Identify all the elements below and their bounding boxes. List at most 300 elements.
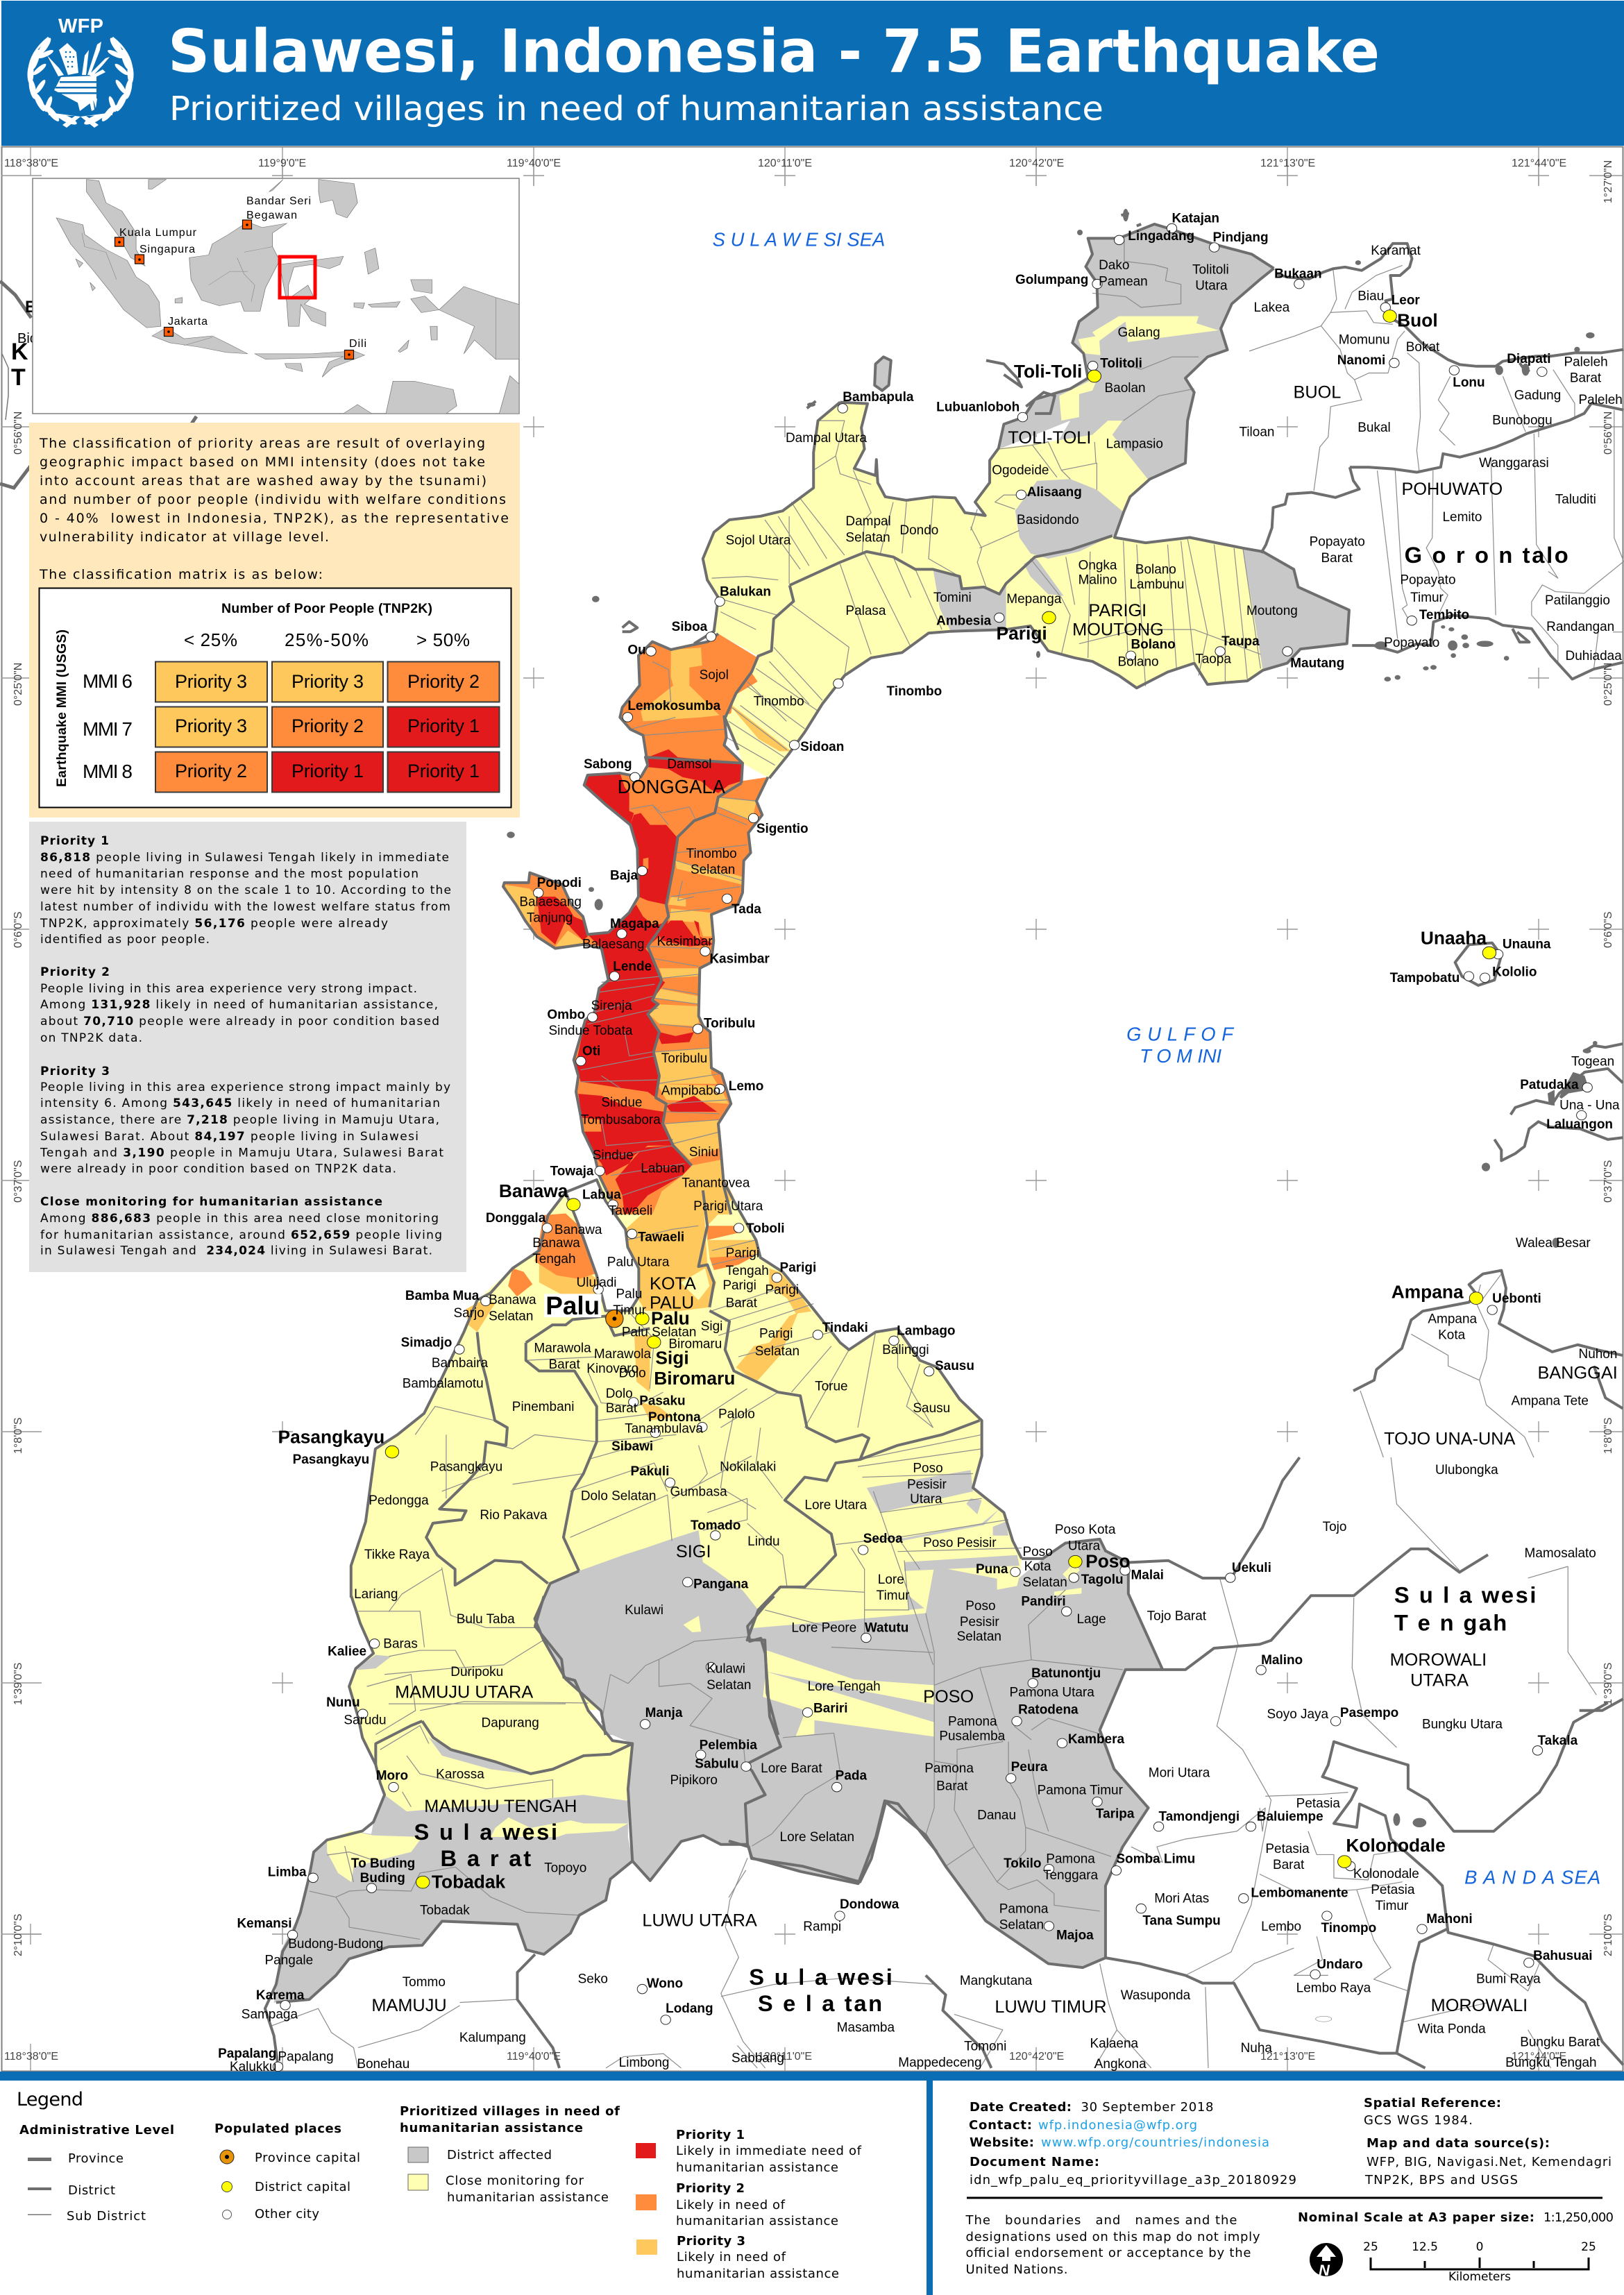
map labels: provinces (414, 542, 1568, 2016)
map labels: sub-districts: Dapurang (482, 1716, 539, 1731)
map labels: sub-districts: Bungku Tengah (1505, 2056, 1597, 2070)
map labels: sub-districts: Sirenja (591, 999, 632, 1013)
map labels: sub-districts: Pamona (1046, 1852, 1095, 1867)
map labels: towns: Moro (376, 1769, 408, 1784)
map labels: towns: Toboli (746, 1221, 785, 1236)
legend: priority classes: Priority 1 (676, 2128, 745, 2142)
map labels: sub-districts: Pamona (924, 1761, 974, 1776)
map: priority 2 neck areas (503, 634, 768, 1214)
map labels: seas: B A N D A SEA (1464, 1866, 1600, 1888)
map labels: towns: Nanomi (1337, 353, 1385, 368)
map labels: sub-districts: Siniu (689, 1145, 718, 1160)
text: close monitoring: for humanitarian assistance, around 652,659 people living (40, 1228, 442, 1242)
map labels: towns: Magapa (610, 917, 659, 931)
map labels: districts: POSO (923, 1687, 974, 1707)
map labels: towns: Donggala (486, 1211, 546, 1226)
map labels: sub-districts: Tiloan (1239, 425, 1274, 439)
map labels: sub-districts: Karamat (1371, 244, 1421, 258)
map labels: towns: Tomado (691, 1518, 741, 1533)
map labels: sub-districts: Poso Pesisir (923, 1536, 997, 1550)
map labels: sub-districts: Lore Utara (804, 1498, 867, 1512)
map labels: towns: Baja (610, 869, 638, 883)
inset: study area red rectangle (280, 257, 315, 298)
map labels: towns: Tamondjengi (1159, 1810, 1240, 1824)
map labels: sub-districts: Timur (1376, 1899, 1408, 1913)
map labels: sub-districts: Nuhon (1579, 1347, 1617, 1362)
map labels: sub-districts: Dolo Selatan (581, 1489, 656, 1504)
map labels: towns: Pelembia (700, 1738, 757, 1752)
map labels: sub-districts: Bambalamotu (403, 1376, 484, 1391)
scale bar (1363, 2240, 1596, 2284)
map labels: district capitals: Parigi (997, 623, 1047, 644)
map labels: sub-districts: Tinombo (754, 695, 804, 709)
map labels: sub-districts: Rio Pakava (480, 1508, 548, 1523)
map labels: provinces: S u l a wesi (414, 1819, 557, 1845)
map labels: towns: Bahusuai (1533, 1949, 1593, 1963)
matrix: priority labels: Priority 2 (291, 715, 364, 736)
map labels: towns: Tembito (1419, 608, 1469, 623)
map labels: sub-districts: Bumi Raya (1476, 1972, 1541, 1987)
map: coordinate labels: 0°25'0"N (12, 663, 24, 706)
map labels: sub-districts: Dampal Utara (786, 431, 867, 446)
legend: priority classes: Likely in need of (676, 2198, 786, 2212)
map labels: towns: Tinombo (886, 684, 942, 699)
inset: city labels: Dili (349, 338, 366, 350)
map labels: sub-districts: Duhiadaa (1566, 649, 1622, 663)
map: clipped labels behind inset: Bic (17, 331, 37, 346)
map labels: towns: Pasangkayu (293, 1453, 369, 1467)
map labels: towns: Malai (1131, 1568, 1164, 1583)
map labels: towns: Kololio (1492, 965, 1537, 980)
inset: city labels (119, 196, 366, 350)
legend: priority classes: humanitarian assistance (677, 2267, 839, 2281)
map labels: district capitals (278, 310, 1487, 1892)
map labels: sub-districts: Basidondo (1017, 513, 1079, 527)
map labels: districts: POHUWATO (1401, 480, 1503, 499)
matrix: poverty column headers: 25%-50% (285, 629, 369, 650)
matrix: priority labels: Priority 1 (407, 715, 480, 736)
map labels: sub-districts: Mangkutana (960, 1974, 1033, 1988)
matrix: priority labels: Priority 1 (291, 761, 364, 781)
map labels: sub-districts: Soyo Jaya (1267, 1707, 1329, 1722)
map labels: sub-districts: Selatan (999, 1918, 1044, 1933)
map labels: towns: Pangana (693, 1577, 749, 1591)
legend: district status: Close monitoring for (446, 2174, 584, 2188)
map labels: sub-districts: Ampibabo (661, 1084, 720, 1099)
map labels: district capitals: Toli-Toli (1014, 361, 1082, 382)
map: other city markers (273, 223, 1592, 2072)
map: coordinate labels: 120°11'0"E (758, 158, 812, 169)
map: priority 3 areas (466, 647, 811, 1421)
map labels: towns: Pontona (648, 1410, 701, 1425)
map labels: towns: Pandiri (1021, 1595, 1066, 1609)
map labels: seas (713, 228, 1600, 1888)
map labels: sub-districts: Tenggara (1043, 1868, 1099, 1883)
map labels: towns: Bamba Mua (405, 1289, 480, 1303)
map: sub-district boundaries (269, 240, 1624, 2068)
map labels: sub-districts: Parigi (765, 1282, 799, 1297)
map labels: sub-districts: Petasia (1371, 1883, 1415, 1897)
map labels: districts: MOROWALI (1390, 1650, 1487, 1670)
map labels: sub-districts: Tinombo (686, 847, 737, 861)
classification text: and number of poor people (individu with welfare conditions (40, 492, 506, 507)
map labels: sub-districts: Dolo (619, 1366, 646, 1381)
map labels: sub-districts: Lore (878, 1573, 904, 1587)
text: priority 1: 86,818 people living in Sulawesi Tengah likely in immediate (40, 851, 449, 865)
map labels: district capitals: Ampana (1392, 1282, 1464, 1303)
map labels: towns: Tampobatu (1390, 971, 1460, 985)
map: coordinate labels: 0°56'0"N (1602, 412, 1614, 455)
map labels: sub-districts: Pangale (265, 1953, 313, 1967)
text: disclaimer (965, 2213, 1260, 2277)
map labels: sub-districts: Tojo (1323, 1520, 1346, 1534)
map labels: towns: Pada (836, 1769, 867, 1784)
classification text (39, 436, 509, 582)
map labels: sub-districts: Pusalemba (939, 1729, 1006, 1744)
map labels: towns: Somba Limu (1116, 1852, 1195, 1867)
map labels: sub-districts: Timur (613, 1303, 646, 1318)
map labels: provinces: T e n gah (1394, 1609, 1507, 1635)
map labels: district capitals: Tobadak (432, 1872, 506, 1892)
matrix: priority labels: Priority 3 (291, 671, 364, 692)
map labels: provinces: G o r o n talo (1405, 542, 1568, 568)
map labels: towns: Popodi (537, 876, 582, 890)
map: coordinate labels: 1°39'0"S (1602, 1663, 1614, 1705)
panel: priority summaries (29, 822, 466, 1272)
map: coordinate labels: 119°40'0"E (507, 2051, 561, 2063)
map labels: districts: MAMUJU TENGAH (424, 1797, 577, 1816)
inset: city labels: Begawan (246, 210, 297, 221)
map labels: towns: Sigentio (756, 822, 809, 836)
map: coordinate labels: 121°13'0"E (1260, 2051, 1315, 2063)
matrix: MMI row headers: MMI 7 (83, 718, 133, 740)
map: Palu bay (566, 1180, 982, 1514)
map: clipped labels behind inset: K (11, 339, 28, 365)
text: priority 2: People living in this area experience very strong impact. (40, 982, 417, 996)
map: coordinate labels: 1°8'0"S (12, 1417, 24, 1454)
inset locator map (33, 178, 519, 414)
map labels: towns: Limba (268, 1865, 307, 1880)
map labels: towns: Lembomanente (1251, 1886, 1348, 1900)
text: close monitoring: in Sulawesi Tengah and 234,024 living in Sulawesi Barat. (40, 1244, 432, 1257)
map labels: sub-districts: Balaesang (519, 895, 582, 909)
text: close monitoring: Close monitoring for humanitarian assistance (40, 1195, 382, 1209)
map labels: sub-districts: Mappedeceng (898, 2056, 982, 2070)
map labels: sub-districts: Selatan (1022, 1575, 1067, 1590)
text: priority 1: identified as poor people. (40, 933, 210, 947)
nominal scale text: Nominal Scale at A3 paper size: (1298, 2210, 1534, 2225)
map labels: sub-districts: Sojol (700, 668, 729, 683)
text: disclaimer: The boundaries and names and the (965, 2213, 1237, 2228)
map labels: sub-districts: Sarudu (344, 1713, 387, 1727)
map labels: towns: Toribulu (704, 1017, 755, 1031)
map labels: sub-districts: Selatan (691, 863, 735, 877)
matrix: MMI row headers: MMI 6 (83, 670, 133, 692)
map labels: sub-districts: Toribulu (661, 1051, 707, 1066)
map labels: towns: Lemo (729, 1079, 763, 1094)
map labels: towns: Sidoan (800, 740, 844, 754)
map labels: sub-districts: Malino (1079, 573, 1117, 587)
map labels: sub-districts: Barat (1570, 371, 1602, 385)
map labels: towns: Pasaku (639, 1394, 686, 1409)
map labels: towns: Puna (976, 1562, 1008, 1577)
map labels: sub-districts: Barat (1321, 551, 1353, 566)
map labels: districts: BANGGAI (1538, 1364, 1618, 1383)
map labels: sub-districts: Lampasio (1106, 437, 1163, 451)
map labels: sub-districts: Pamona (999, 1902, 1049, 1916)
icon: WFP logo (27, 15, 134, 128)
map labels: sub-districts: Tolitoli (1192, 262, 1229, 277)
inset: city labels: Kuala Lumpur (119, 227, 197, 239)
map labels: towns: Siboa (672, 620, 708, 634)
map labels: district capitals: Sigi (655, 1348, 689, 1369)
map labels: sub-districts: Marawola (534, 1341, 591, 1356)
map labels: sub-districts: Selatan (755, 1344, 800, 1359)
map labels: towns: Baluiempe (1257, 1810, 1323, 1824)
map labels: towns: Lemokosumba (627, 699, 721, 713)
map labels: sub-districts: Nokilalaki (720, 1460, 776, 1475)
map: clipped labels behind inset (11, 298, 37, 391)
map labels: sub-districts: Lembo (1261, 1920, 1301, 1934)
map labels: sub-districts: Palolo (718, 1407, 755, 1422)
legend: administrative level (19, 2123, 174, 2224)
map labels: sub-districts: Bambaira (432, 1356, 488, 1371)
map labels: district capitals: Banawa (499, 1180, 568, 1201)
map labels: towns: Unauna (1503, 938, 1551, 952)
map labels: sub-districts: Poso (1022, 1545, 1053, 1559)
panel: document metadata: idn_wfp_palu_eq_priorityvillage_a3p_20180929 (970, 2173, 1296, 2187)
map labels: towns: Lingadang (1128, 229, 1194, 244)
map labels: towns: Uekuli (1232, 1561, 1271, 1575)
map labels: towns: Batunontju (1031, 1666, 1101, 1681)
panel: classification explanation (29, 423, 520, 818)
text: priority 1 (40, 834, 451, 947)
text: disclaimer: official endorsement or acceptance by the (966, 2246, 1251, 2260)
map labels: sub-districts: Lindu (747, 1534, 780, 1549)
legend: district status (400, 2104, 620, 2205)
map labels: sub-districts: Lage (1076, 1612, 1106, 1627)
map labels: towns: Kaliee (328, 1644, 366, 1659)
map labels: sub-districts: Bungku Barat (1520, 2035, 1600, 2049)
map labels: sub-districts: Barat (606, 1401, 638, 1416)
map labels: sub-districts: Sabbang (731, 2051, 784, 2066)
legend: district status: humanitarian assistance (400, 2121, 583, 2135)
map labels: towns: Pindjang (1213, 230, 1269, 245)
map labels: towns: Sedoa (863, 1532, 903, 1546)
map: coordinate labels: 119°40'0"E (507, 158, 561, 169)
map labels: sub-districts: Palu (616, 1287, 642, 1302)
text: close monitoring: Among 886,683 people in this area need close monitoring (40, 1212, 439, 1226)
text: priority 2 (40, 965, 439, 1045)
map: close monitoring villages (327, 316, 1263, 1882)
matrix: axis titles (54, 601, 432, 787)
text: priority 3: were already in poor condition based on TNP2K data. (40, 1162, 396, 1176)
map labels: sub-districts: Masamba (837, 2020, 895, 2035)
map labels: towns: Papalang (218, 2047, 276, 2061)
map labels: districts: TOLI-TOLI (1008, 428, 1091, 448)
map labels: sub-districts: Damsol (667, 757, 712, 772)
map labels: towns: Lubuanloboh (936, 400, 1020, 415)
map: district affected and close monitoring base areas (274, 224, 1349, 2002)
map labels: sub-districts: Palasa (845, 604, 886, 618)
panel: spatial reference and sources: TNP2K, BPS and USGS (1364, 2173, 1518, 2187)
map labels: towns: Bambapula (843, 390, 914, 405)
map labels: sub-districts: Utara (1195, 279, 1228, 294)
map labels: towns: Labua (582, 1187, 621, 1202)
map labels: sub-districts: Topoyo (544, 1861, 586, 1875)
map labels: towns: Golumpang (1015, 273, 1088, 287)
map labels: towns: Manja (645, 1706, 683, 1720)
map labels: districts: BUOL (1293, 383, 1341, 403)
inset: city labels: Jakarta (168, 316, 208, 328)
map labels: sub-districts: Palu Selatan (622, 1326, 696, 1340)
map labels: towns: Patudaka (1520, 1078, 1579, 1092)
map labels: sub-districts: Biromaru (668, 1337, 722, 1351)
map: clipped labels behind inset: E (25, 298, 36, 316)
map labels: sub-districts: Ogodeide (992, 463, 1049, 477)
map labels: sub-districts: Pipikoro (670, 1773, 718, 1788)
text: priority 1: Priority 1 (40, 834, 109, 848)
map labels: towns: Sausu (935, 1359, 974, 1373)
map labels: sub-districts: Poso Kota (1055, 1523, 1116, 1537)
map labels: towns: Kasimbar (709, 952, 770, 967)
classification text: 0 - 40% lowest in Indonesia, TNP2K), as the representative (40, 511, 509, 526)
map labels: sub-districts: Lambunu (1129, 577, 1184, 592)
map labels: sub-districts: Lemito (1442, 510, 1482, 525)
map labels: sub-districts: Mepanga (1006, 592, 1062, 607)
map: coordinate labels: 0°37'0"S (1602, 1160, 1614, 1203)
map labels: towns: Peura (1011, 1760, 1048, 1775)
map labels: sub-districts: Danau (977, 1808, 1016, 1822)
map labels: district capitals: Kolonodale (1346, 1835, 1446, 1856)
legend: administrative level: Sub District (67, 2209, 146, 2224)
map labels: towns: To Buding (351, 1856, 415, 1871)
matrix: priority labels: Priority 2 (175, 761, 247, 781)
map labels: sub-districts: Togean (1571, 1054, 1614, 1069)
map labels: sub-districts: Tobadak (420, 1904, 470, 1918)
map labels: sub-districts: Pamona Utara (1010, 1685, 1094, 1700)
map labels: sub-districts: Wasuponda (1121, 1988, 1191, 2003)
map labels: sub-districts: Baolan (1105, 381, 1146, 396)
map labels: sub-districts: Pamona (948, 1715, 997, 1729)
map labels: towns: Mautang (1290, 657, 1344, 671)
map labels: sub-districts: Ongka (1079, 558, 1117, 573)
map labels: towns: Kambera (1068, 1732, 1124, 1747)
map labels: towns: Oti (582, 1044, 600, 1059)
map labels: districts: MOROWALI (1431, 1996, 1528, 2015)
map labels: sub-districts: Banawa (532, 1236, 580, 1251)
map labels: sub-districts: Pedongga (369, 1493, 429, 1508)
text: priority 2: Priority 2 (40, 965, 110, 979)
map labels: district capitals: Palu (651, 1308, 690, 1329)
map labels: seas: T O M INI (1140, 1045, 1222, 1067)
matrix: axis titles: Earthquake MMI (USGS) (54, 629, 69, 787)
matrix: poverty column headers: < 25% (184, 629, 237, 650)
scale bar: 0 (1476, 2240, 1483, 2254)
map labels: towns: Buding (360, 1871, 405, 1886)
map labels: sub-districts: Lore Barat (761, 1761, 822, 1776)
map labels: sub-districts: Karossa (436, 1767, 484, 1781)
matrix: poverty column headers: > 50% (416, 629, 470, 650)
map labels: towns: Towaja (550, 1165, 594, 1179)
map labels: districts: PALU (650, 1293, 694, 1312)
map: coordinate labels: 1°27'0"N (1602, 160, 1614, 203)
inset: city labels: Singapura (139, 244, 195, 255)
map labels: sub-districts: Ulujadi (577, 1276, 617, 1290)
map labels: towns: Katajan (1172, 212, 1219, 226)
map labels: district capitals: Biromaru (654, 1368, 735, 1389)
text: priority 3: assistance, there are 7,218 people living in Mamuju Utara, (40, 1113, 439, 1127)
map labels: districts: MAMUJU (371, 1996, 447, 2015)
map labels: sub-districts: Selatan (707, 1678, 751, 1693)
legend: priority classes: Likely in immediate need of (676, 2144, 862, 2158)
map labels: sub-districts: Kolonodale (1353, 1867, 1419, 1881)
legend: populated places: Populated places (214, 2122, 341, 2136)
map labels: sub-districts: Petasia (1296, 1797, 1340, 1811)
map labels: sub-districts: Barat (549, 1357, 581, 1372)
map labels: towns: Tolitoli (1100, 356, 1142, 371)
map labels: sub-districts: Lakea (1254, 300, 1290, 315)
map labels: sub-districts: Kulawi (625, 1603, 663, 1618)
panel: document metadata: Document Name: (970, 2155, 1099, 2169)
map labels: sub-districts: Ulubongka (1435, 1463, 1498, 1477)
map: coordinate labels: 121°13'0"E (1260, 158, 1315, 169)
map labels: sub-districts: Taluditi (1555, 492, 1596, 507)
panel: document metadata: Contact: (969, 2118, 1032, 2133)
header banner (1, 1, 1624, 146)
legend: priority classes: humanitarian assistance (676, 2214, 838, 2228)
legend: administrative level: Province (68, 2151, 124, 2166)
map labels: sub-districts: Gumbasa (670, 1484, 727, 1499)
map labels: sub-districts: Kasimbar (657, 934, 713, 949)
map: more priority 2 areas (508, 1213, 759, 1296)
map: district capital markers (385, 310, 1496, 1888)
map labels: towns: Taupa (1221, 634, 1260, 649)
map labels: towns: Undaro (1317, 1958, 1363, 1972)
map: coordinate labels: 0°56'0"N (12, 412, 24, 455)
map labels: sub-districts: Bolano (1135, 563, 1176, 577)
map labels: sub-districts: Parigi (759, 1327, 793, 1341)
map labels: towns: Balukan (720, 584, 771, 599)
legend: district status: District affected (447, 2148, 552, 2162)
text: priority 1: latest number of individu with the lowest welfare status from (40, 900, 450, 914)
map labels: towns: Pakuli (631, 1464, 669, 1479)
map labels: sub-districts: Kulawi (707, 1662, 745, 1677)
map labels: sub-districts: Parigi (722, 1278, 756, 1293)
map labels: sub-districts: Tengah (726, 1264, 769, 1278)
map labels: sub-districts: Walea Besar (1516, 1236, 1591, 1251)
map labels: sub-districts: Mamosalato (1525, 1546, 1596, 1561)
map: coordinate labels: 120°11'0"E (758, 2051, 812, 2063)
map labels: towns: Ambesia (936, 614, 992, 629)
map labels: towns: Tana Sumpu (1142, 1913, 1221, 1928)
map labels: sub-districts: Balaesang (582, 938, 645, 952)
map labels: sub-districts: Poso (965, 1599, 996, 1614)
footer band (0, 2072, 1624, 2295)
map labels: sub-districts: Dako (1099, 258, 1129, 273)
map: orange patch in red zone (638, 858, 668, 924)
text: priority 1: TNP2K, approximately 56,176 people were already (40, 917, 388, 931)
map labels: sub-districts: Utara (1068, 1539, 1101, 1553)
map labels: sub-districts: Barat (726, 1296, 758, 1310)
map labels: sub-districts: Angkona (1094, 2057, 1147, 2072)
map labels: sub-districts: Selatan (957, 1629, 1001, 1644)
map labels: sub-districts: Petasia (1265, 1842, 1310, 1856)
map labels: sub-districts: Tomini (933, 591, 972, 605)
map labels: districts: DONGGALA (618, 776, 726, 797)
legend: priority classes: Likely in need of (677, 2250, 786, 2264)
map labels: district capitals: Poso (1085, 1551, 1131, 1572)
